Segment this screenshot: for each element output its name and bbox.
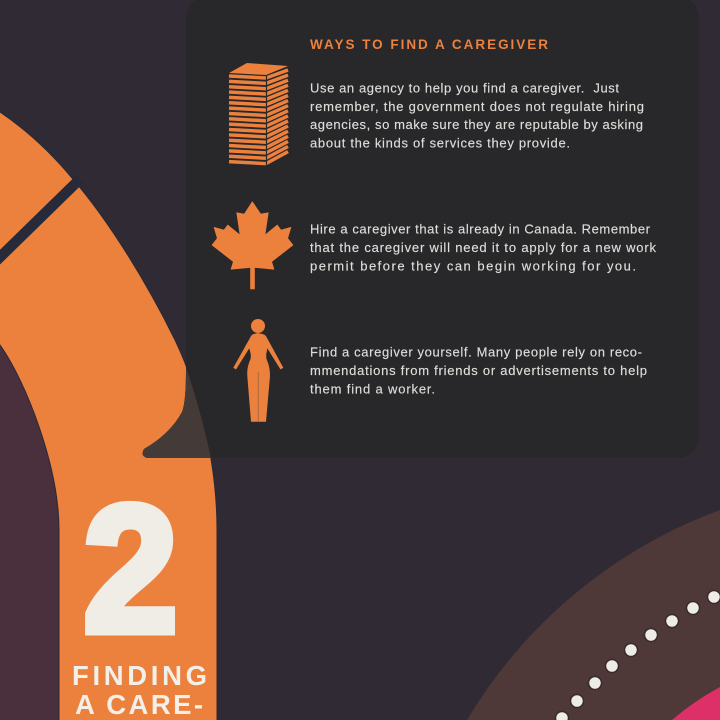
panel: ways to find a caregiver — [143, 0, 699, 458]
text block: use an agency: agencies, so make sure they are reputable by asking — [310, 117, 643, 132]
step title: A CARE- — [75, 689, 203, 720]
text block: hire in Canada: permit before they can begin working for you. — [310, 258, 636, 274]
text block: find yourself — [310, 344, 647, 396]
heading: WAYS TO FIND A CAREGIVER — [310, 37, 548, 52]
text block: use an agency — [310, 80, 644, 150]
step title: FINDING — [72, 660, 207, 691]
step title — [72, 660, 207, 720]
text block: find yourself: Find a caregiver yourself. Many people rely on reco- — [310, 344, 642, 360]
brown path arc at lower right — [467, 510, 720, 720]
text block: find yourself: them find a worker. — [310, 382, 435, 396]
text block: hire in Canada: Hire a caregiver that is already in Canada. Remember — [310, 222, 651, 236]
pink path arc — [672, 687, 720, 720]
orange path band for step 2 — [0, 109, 217, 720]
text block: hire in Canada: that the caregiver will need it to apply for a new work — [310, 240, 656, 255]
icon: apartment building — [229, 63, 288, 167]
text block: use an agency: about the kinds of services they provide. — [310, 136, 570, 150]
icon: maple leaf — [212, 202, 293, 289]
text block: find yourself: mmendations from friends or advertisements to help — [310, 363, 647, 378]
text block: use an agency: Use an agency to help you find a caregiver. Just — [310, 80, 619, 96]
inner plum area of the path — [0, 340, 59, 720]
dotted route — [556, 590, 720, 720]
text block: use an agency: remember, the government does not regulate hiring — [310, 99, 644, 114]
icon: woman figure — [233, 319, 283, 422]
step number 2: 2 — [83, 469, 178, 670]
text block: hire in Canada — [310, 222, 656, 274]
